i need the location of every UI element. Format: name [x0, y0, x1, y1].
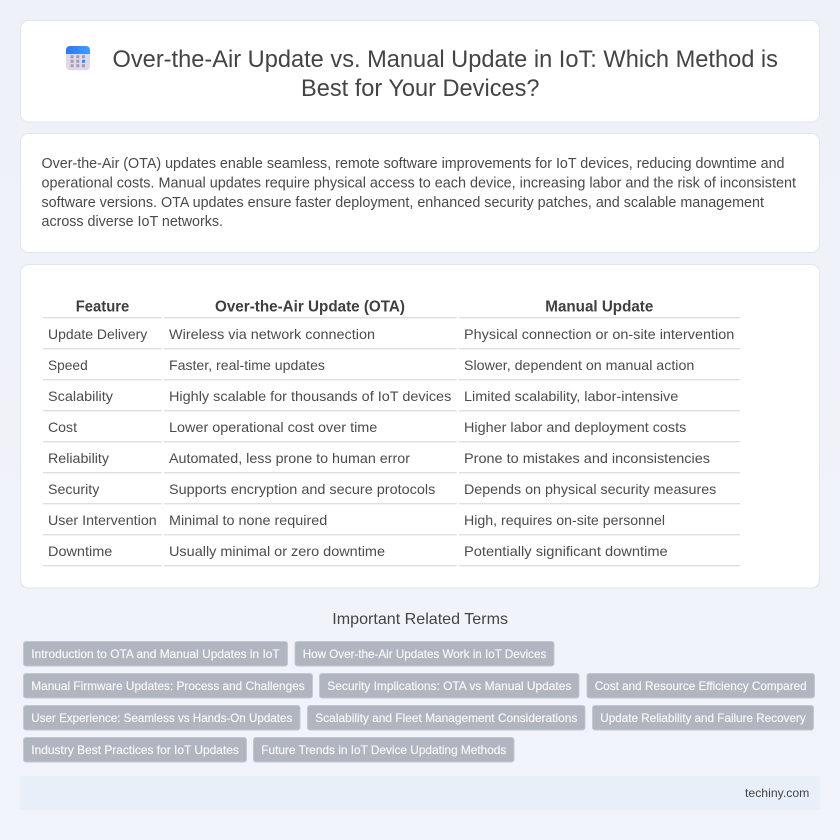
panel: comparison table	[20, 264, 820, 588]
tag: Scalability and Fleet Management Considerations	[315, 711, 577, 725]
panel: summary paragraph	[20, 134, 820, 252]
row: user intervention: User Intervention	[48, 512, 157, 528]
row: downtime: Usually minimal or zero downtime	[169, 543, 385, 559]
row: speed: Speed	[48, 357, 88, 373]
title	[112, 46, 778, 102]
tag	[592, 706, 814, 730]
row: downtime	[48, 543, 668, 559]
row: cost	[48, 419, 686, 435]
tag: Update Reliability and Failure Recovery	[600, 711, 806, 725]
row: reliability: Reliability	[48, 450, 109, 466]
tag: Introduction to OTA and Manual Updates in IoT	[31, 647, 280, 661]
row: cost: Lower operational cost over time	[169, 419, 378, 435]
title: Over-the-Air Update vs. Manual Update in IoT: Which Method is	[112, 46, 778, 73]
summary text: across diverse IoT networks.	[42, 214, 223, 230]
row: downtime: Potentially significant downtime	[464, 543, 668, 559]
tag: How Over-the-Air Updates Work in IoT Devices	[303, 647, 546, 661]
tag	[295, 642, 554, 666]
row: security: Depends on physical security measures	[464, 481, 716, 497]
tag	[24, 674, 312, 698]
title: Best for Your Devices?	[301, 75, 540, 102]
row: user intervention	[48, 512, 665, 528]
row: user intervention: High, requires on-site personnel	[464, 512, 665, 528]
row: speed	[48, 357, 694, 373]
row: security: Security	[48, 481, 99, 497]
row: cost: Higher labor and deployment costs	[464, 419, 686, 435]
tag	[24, 738, 246, 762]
row: downtime: Downtime	[48, 543, 113, 559]
heading: important related terms: Important Related Terms	[332, 611, 508, 628]
table header row: Over-the-Air Update (OTA)	[215, 298, 405, 316]
footer: techiny.com	[745, 786, 809, 800]
table header row	[76, 298, 653, 316]
footer	[20, 776, 820, 810]
tag: Future Trends in IoT Device Updating Methods	[261, 743, 506, 757]
icon: calendar	[66, 46, 90, 70]
row: update delivery: Wireless via network connection	[169, 326, 375, 342]
summary text	[42, 156, 796, 230]
row: reliability	[48, 450, 710, 466]
panel: title header	[20, 20, 820, 122]
row: speed: Slower, dependent on manual action	[464, 357, 694, 373]
tag: Security Implications: OTA vs Manual Updates	[327, 679, 571, 693]
tag	[587, 674, 814, 698]
tag: Industry Best Practices for IoT Updates	[31, 743, 239, 757]
row: scalability: Highly scalable for thousands of IoT devices	[169, 388, 451, 404]
row: scalability	[48, 388, 679, 404]
tag	[24, 706, 300, 730]
tag	[308, 706, 585, 730]
row: scalability: Scalability	[48, 388, 113, 404]
row: scalability: Limited scalability, labor-intensive	[464, 388, 679, 404]
row: security: Supports encryption and secure protocols	[169, 481, 435, 497]
tag	[24, 642, 288, 666]
tag: Cost and Resource Efficiency Compared	[595, 679, 807, 693]
tag: Manual Firmware Updates: Process and Challenges	[31, 679, 305, 693]
row: update delivery	[48, 326, 734, 342]
summary text: software versions. OTA updates ensure faster deployment, enhanced security patches, and scalable management	[42, 195, 764, 211]
row: reliability: Automated, less prone to human error	[169, 450, 410, 466]
summary text: operational costs. Manual updates require physical access to each device, increasing labor and the risk of inconsistent	[42, 176, 796, 192]
row: update delivery: Physical connection or on-site intervention	[464, 326, 734, 342]
row: cost: Cost	[48, 419, 77, 435]
table header row: Manual Update	[545, 298, 653, 316]
tag: User Experience: Seamless vs Hands-On Updates	[31, 711, 292, 725]
row: speed: Faster, real-time updates	[169, 357, 325, 373]
tag	[254, 738, 514, 762]
row: security	[48, 481, 716, 497]
table header row: Feature	[76, 298, 129, 316]
tag	[320, 674, 579, 698]
row: update delivery: Update Delivery	[48, 326, 147, 342]
related terms tags	[24, 642, 814, 762]
summary text: Over-the-Air (OTA) updates enable seamless, remote software improvements for IoT devices, reducing downtime and	[42, 156, 784, 172]
row: user intervention: Minimal to none required	[169, 512, 327, 528]
row: reliability: Prone to mistakes and inconsistencies	[464, 450, 710, 466]
